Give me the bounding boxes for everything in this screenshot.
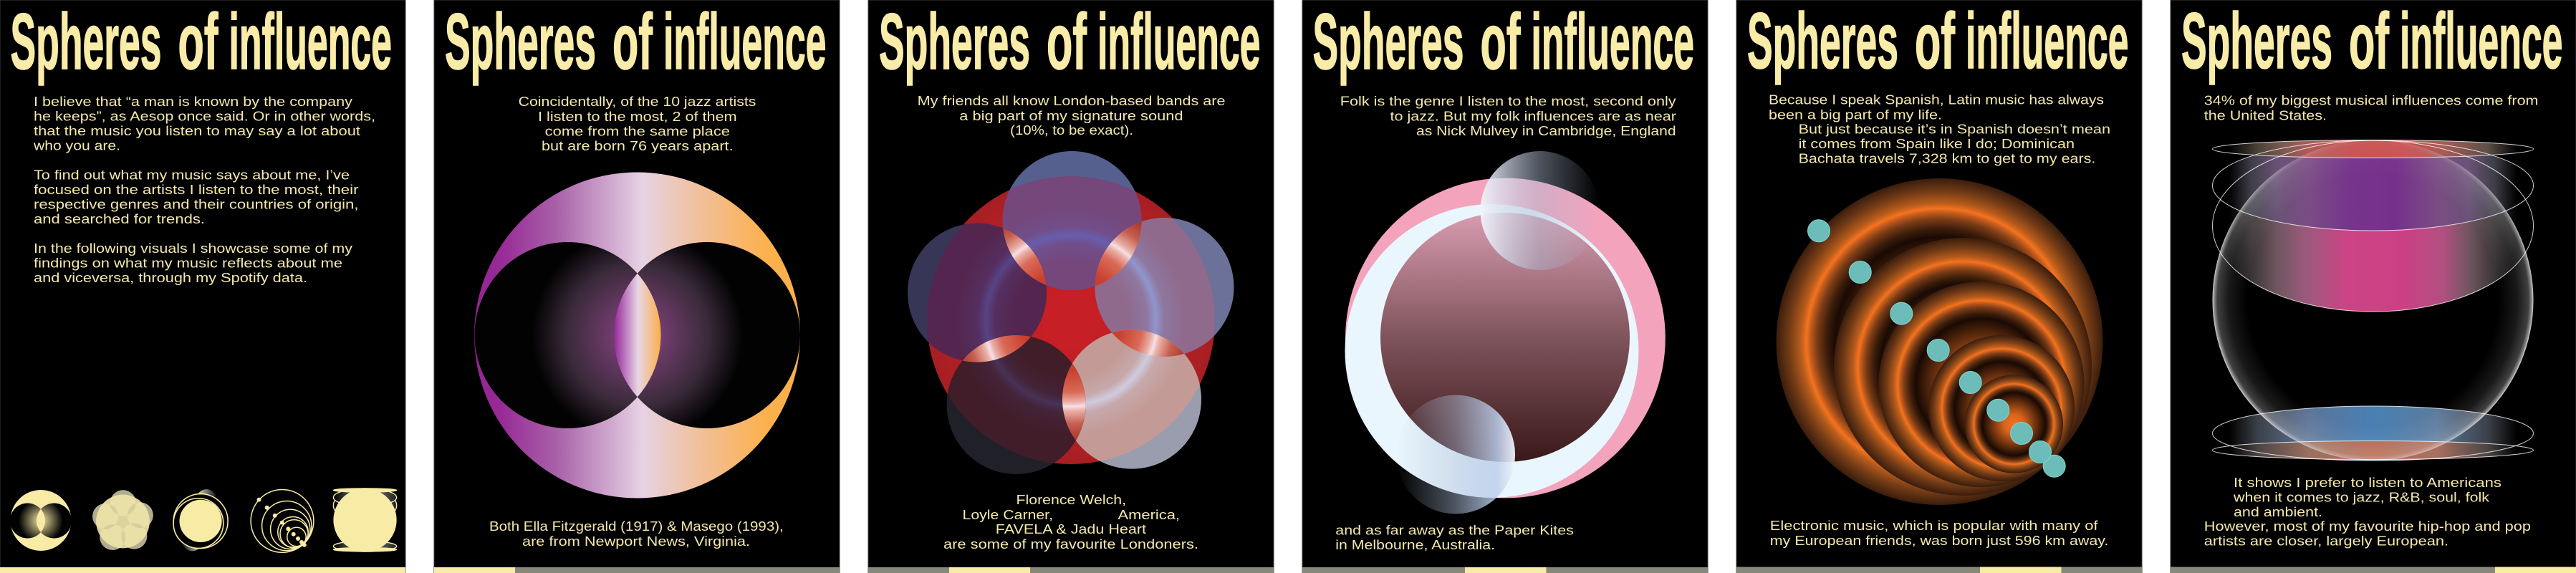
- text block: introduction: [33, 95, 375, 285]
- text block: introduction: and searched for trends.: [34, 212, 205, 226]
- text block: introduction: findings on what my music reflects about me: [34, 256, 342, 271]
- text block: top caption: a big part of my signature sound: [959, 109, 1183, 123]
- text block: top caption: My friends all know London-based bands are: [918, 94, 1225, 108]
- slice: purple: [2212, 140, 2533, 231]
- progress bar: [434, 567, 840, 573]
- text block: introduction: he keeps”, as Aesop once said. Or in other words,: [34, 109, 375, 123]
- slice outlines: [2212, 140, 2533, 461]
- text block: top caption: as Nick Mulvey in Cambridge, England: [1416, 124, 1676, 138]
- text block: bottom caption: in Melbourne, Australia.: [1335, 538, 1495, 552]
- text block: introduction: To find out what my music says about me, I’ve: [34, 168, 350, 182]
- progress bar: [868, 567, 1274, 573]
- text block: top caption: I listen to the most, 2 of them: [538, 110, 737, 124]
- slice: red: [2212, 140, 2533, 158]
- text block: bottom caption: and as far away as the Paper Kites: [1335, 523, 1574, 537]
- text block: top caption: [1340, 95, 1676, 138]
- slice: pink: [2212, 140, 2533, 312]
- text block: introduction: focused on the artists I listen to the most, their: [34, 183, 358, 197]
- panel: introduction: influence: [229, 0, 392, 86]
- text block: top caption: but are born 76 years apart.: [542, 139, 734, 153]
- text block: bottom caption: Electronic music, which is popular with many of: [1770, 519, 2099, 533]
- title: of: [178, 0, 218, 86]
- text block: bottom caption: are some of my favourite Londoners.: [943, 537, 1198, 552]
- text block: top caption: But just because it’s in Spanish doesn’t mean: [1799, 122, 2110, 137]
- text block: top caption: the United States.: [2204, 108, 2327, 122]
- text block: top caption: [2204, 93, 2539, 122]
- panel: folk: [1302, 0, 1708, 573]
- text block: top caption: to jazz. But my folk influences are as near: [1390, 109, 1676, 123]
- title: of: [612, 0, 653, 86]
- title: Spheres: [1312, 0, 1464, 86]
- text block: introduction: I believe that “a man is known by the company: [34, 95, 352, 109]
- progress bar: [2171, 567, 2576, 573]
- title: Spheres: [10, 0, 162, 86]
- text block: top caption: 34% of my biggest musical influences come from: [2204, 93, 2539, 107]
- panel: jazz artists: influence: [663, 0, 827, 86]
- text block: top caption: [1769, 92, 2110, 166]
- overlaps between neighbouring circles: [963, 222, 1184, 440]
- small sphere: Melbourne: [1396, 395, 1515, 514]
- text block: top caption: come from the same place: [545, 124, 730, 138]
- text block: introduction: respective genres and their countries of origin,: [34, 198, 358, 212]
- text block: bottom caption: Florence Welch,: [1016, 493, 1126, 507]
- text block: bottom caption: [489, 519, 784, 549]
- text block: bottom caption: [1770, 519, 2108, 548]
- panel: Latin and electronic music: [1736, 0, 2142, 573]
- text block: bottom caption: when it comes to jazz, R&B, soul, folk: [2233, 490, 2490, 504]
- text block: top caption: Because I speak Spanish, Latin music has always: [1769, 92, 2104, 107]
- text block: introduction: who you are.: [33, 139, 120, 153]
- dots: artist origins: [1808, 220, 2065, 477]
- text block: top caption: it comes from Spain like I do; Dominican: [1799, 137, 2075, 151]
- text block: top caption: [519, 95, 756, 153]
- text block: bottom caption: [1335, 523, 1574, 552]
- circle: right: [1095, 218, 1234, 357]
- circle: left: [908, 223, 1047, 362]
- text block: bottom caption: [2204, 476, 2531, 549]
- text block: bottom caption: and ambient.: [2234, 505, 2322, 519]
- slice: orange: [2212, 441, 2533, 460]
- text block: introduction: In the following visuals I showcase some of my: [34, 241, 352, 256]
- panel: introduction: [0, 0, 405, 573]
- icon: ring with two small circles: [173, 489, 228, 551]
- text block: bottom caption: my European friends, was born just 596 km away.: [1770, 534, 2108, 548]
- progress bar: [0, 567, 405, 573]
- title: Spheres: [879, 0, 1030, 86]
- progress bar: [1736, 567, 2142, 573]
- circle: bottom right: [1062, 330, 1201, 469]
- text block: bottom caption: However, most of my favourite hip-hop and pop: [2204, 519, 2531, 534]
- text block: top caption: been a big part of my life.: [1769, 107, 1942, 122]
- circle: bottom left: [947, 335, 1086, 474]
- text block: bottom caption: Loyle Carner,: [963, 508, 1053, 522]
- text block: top caption: Coincidentally, of the 10 jazz artists: [519, 95, 756, 109]
- chart: ring with two small spheres: [1345, 151, 1666, 514]
- chart: overlapping spheres: [474, 172, 800, 499]
- text block: bottom caption: [943, 493, 1198, 552]
- chart: five circles over red sphere: [908, 151, 1234, 474]
- panel: United States: [2171, 0, 2576, 573]
- small sphere: Cambridge: [1480, 151, 1599, 270]
- icon: two overlapping circles: [10, 490, 72, 551]
- text block: top caption: [918, 94, 1225, 138]
- text block: top caption: (10%, to be exact).: [1010, 123, 1133, 138]
- text block: bottom caption: It shows I prefer to listen to Americans: [2234, 476, 2501, 490]
- title: of: [1047, 0, 1087, 86]
- panel: London bands: [868, 0, 1274, 573]
- circle: top: [1003, 151, 1142, 290]
- text block: bottom caption: Both Ella Fitzgerald (1917) & Masego (1993),: [489, 519, 784, 534]
- progress bar: [1302, 567, 1708, 573]
- panel: folk: influence: [1532, 0, 1694, 86]
- title: Spheres: [445, 0, 596, 86]
- icon: five circles: [92, 490, 153, 550]
- sphere outline: [2212, 140, 2533, 461]
- text block: bottom caption: are from Newport News, Virginia.: [522, 534, 750, 549]
- text block: bottom caption: America,: [1118, 508, 1180, 522]
- slice: blue: [2212, 406, 2533, 461]
- text block: top caption: Bachata travels 7,328 km to get to my ears.: [1799, 152, 2095, 166]
- panel: London bands: influence: [1097, 0, 1261, 86]
- panel: jazz artists: [434, 0, 840, 573]
- icon: sphere with discs: [333, 488, 397, 552]
- chart: nested distance spheres: [1777, 178, 2103, 505]
- title: of: [1480, 0, 1521, 86]
- text block: introduction: that the music you listen to may say a lot about: [34, 124, 360, 138]
- text block: bottom caption: artists are closer, largely European.: [2204, 534, 2448, 549]
- text block: introduction: and viceversa, through my Spotify data.: [34, 271, 307, 285]
- text block: top caption: Folk is the genre I listen to the most, second only: [1340, 95, 1676, 109]
- icon: nested circles with dots: [251, 490, 314, 552]
- text block: bottom caption: FAVELA & Jadu Heart: [996, 522, 1146, 536]
- chart: sphere with coloured slices: [2212, 140, 2533, 461]
